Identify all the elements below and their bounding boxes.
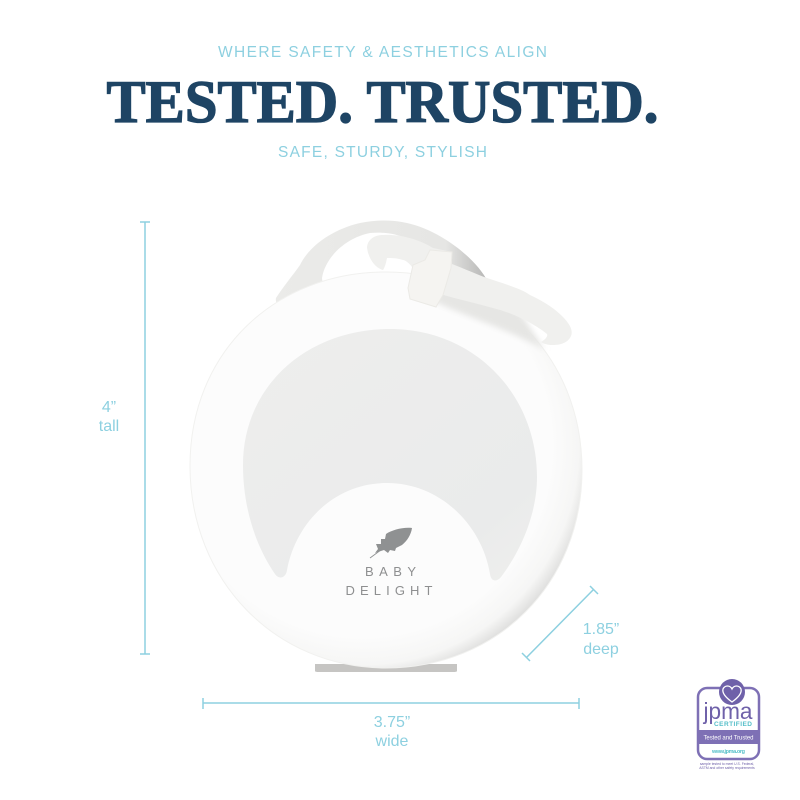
- tested band: [698, 730, 759, 744]
- subheading: SAFE, STURDY, STYLISH: [278, 144, 487, 161]
- fine print: [699, 762, 755, 770]
- jpma wordmark: jpma: [703, 698, 753, 724]
- carrying strap: [276, 221, 488, 310]
- case body: [190, 272, 582, 672]
- JPMA certification badge: Tested and Trusted: [704, 736, 754, 742]
- depth label: deep: [583, 641, 619, 658]
- fine print: ASTM and other safety requirements: [699, 766, 755, 770]
- width label: [374, 714, 410, 750]
- clip joint: [408, 250, 452, 307]
- depth label: 1.85”: [583, 621, 619, 638]
- badge frame: [698, 688, 759, 759]
- eyebrow heading: WHERE SAFETY & AESTHETICS ALIGN: [218, 44, 547, 61]
- url: www.jpma.org: [711, 749, 745, 755]
- logo: brand name: BABY: [365, 564, 416, 579]
- logo: feather: [370, 528, 412, 558]
- depth label: [583, 621, 619, 658]
- moon panel: [243, 329, 537, 580]
- height label: 4”: [102, 399, 116, 416]
- certified: CERTIFIED: [714, 721, 752, 728]
- JPMA certification badge: [698, 679, 759, 770]
- strap shadow: [425, 285, 545, 350]
- dimension: height: [140, 222, 150, 654]
- fine print: sample tested to meet U.S. Federal,: [700, 762, 754, 766]
- heart circle: [719, 679, 745, 705]
- pacifier clip ring: [367, 235, 572, 345]
- base foot: [315, 664, 457, 672]
- main title: TESTED. TRUSTED.: [106, 69, 658, 135]
- height label: [99, 399, 119, 435]
- dimension: width: [203, 698, 579, 709]
- product illustration: pacifier case: [190, 221, 582, 672]
- width label: wide: [375, 733, 409, 750]
- dimension: depth: [522, 586, 598, 661]
- height label: tall: [99, 418, 119, 435]
- logo: brand name: [346, 564, 433, 598]
- logo: brand name: DELIGHT: [346, 583, 433, 598]
- width label: 3.75”: [374, 714, 410, 731]
